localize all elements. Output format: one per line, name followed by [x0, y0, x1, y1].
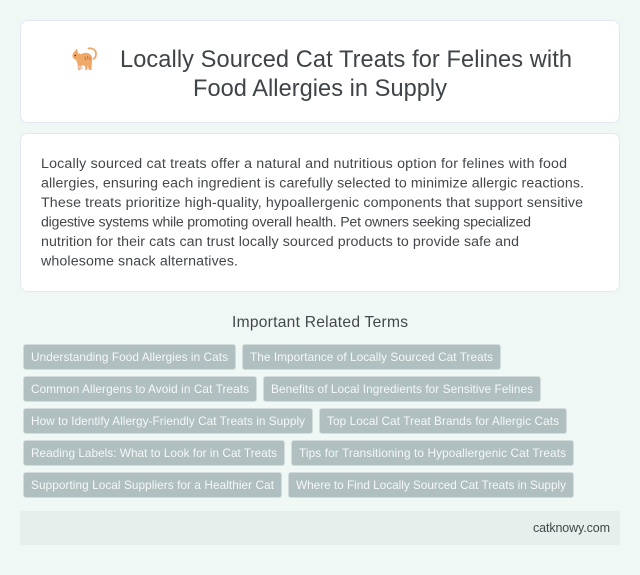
- tag: [242, 344, 500, 370]
- tag: Supporting Local Suppliers for a Healthier Cat: [31, 478, 275, 492]
- tag: Tips for Transitioning to Hypoallergenic Cat Treats: [299, 446, 566, 460]
- tag: Common Allergens to Avoid in Cat Treats: [31, 382, 249, 396]
- heading: related terms: Important Related Terms: [232, 314, 408, 331]
- description text: wholesome snack alternatives.: [40, 254, 238, 270]
- tag: How to Identify Allergy-Friendly Cat Treats in Supply: [31, 414, 305, 428]
- tag: [24, 440, 284, 466]
- tag: Understanding Food Allergies in Cats: [31, 350, 228, 364]
- panel: title card: [20, 20, 620, 122]
- icon: cat: [72, 48, 96, 70]
- tag: Benefits of Local Ingredients for Sensitive Felines: [271, 382, 533, 396]
- description text: digestive systems while promoting overall health. Pet owners seeking specialized: [41, 214, 531, 230]
- footer: catknowy.com: [533, 521, 610, 535]
- description text: allergies, ensuring each ingredient is carefully selected to minimize allergic reactions.: [41, 176, 584, 192]
- title: Food Allergies in Supply: [193, 76, 447, 102]
- tag: [24, 472, 282, 498]
- tag: [264, 376, 540, 402]
- description text: These treats prioritize high-quality, hypoallergenic components that support sensitive: [41, 195, 583, 211]
- tag: [320, 408, 566, 434]
- tag: [24, 408, 312, 434]
- panel: related term tags: [24, 344, 574, 498]
- tag: [24, 376, 256, 402]
- description text: nutrition for their cats can trust locally sourced products to provide safe and: [41, 234, 519, 250]
- footer: [20, 511, 620, 545]
- description text: [40, 156, 584, 270]
- tag: [288, 472, 574, 498]
- panel: description: [20, 134, 620, 292]
- tag: [24, 344, 236, 370]
- tag: The Importance of Locally Sourced Cat Treats: [250, 350, 493, 364]
- tag: [292, 440, 574, 466]
- description text: Locally sourced cat treats offer a natural and nutritious option for felines with food: [41, 156, 567, 172]
- tag: Where to Find Locally Sourced Cat Treats in Supply: [296, 478, 566, 492]
- tag: Top Local Cat Treat Brands for Allergic Cats: [327, 414, 559, 428]
- tag: Reading Labels: What to Look for in Cat Treats: [31, 446, 277, 460]
- title: Locally Sourced Cat Treats for Felines with: [120, 47, 572, 73]
- title: [120, 47, 572, 102]
